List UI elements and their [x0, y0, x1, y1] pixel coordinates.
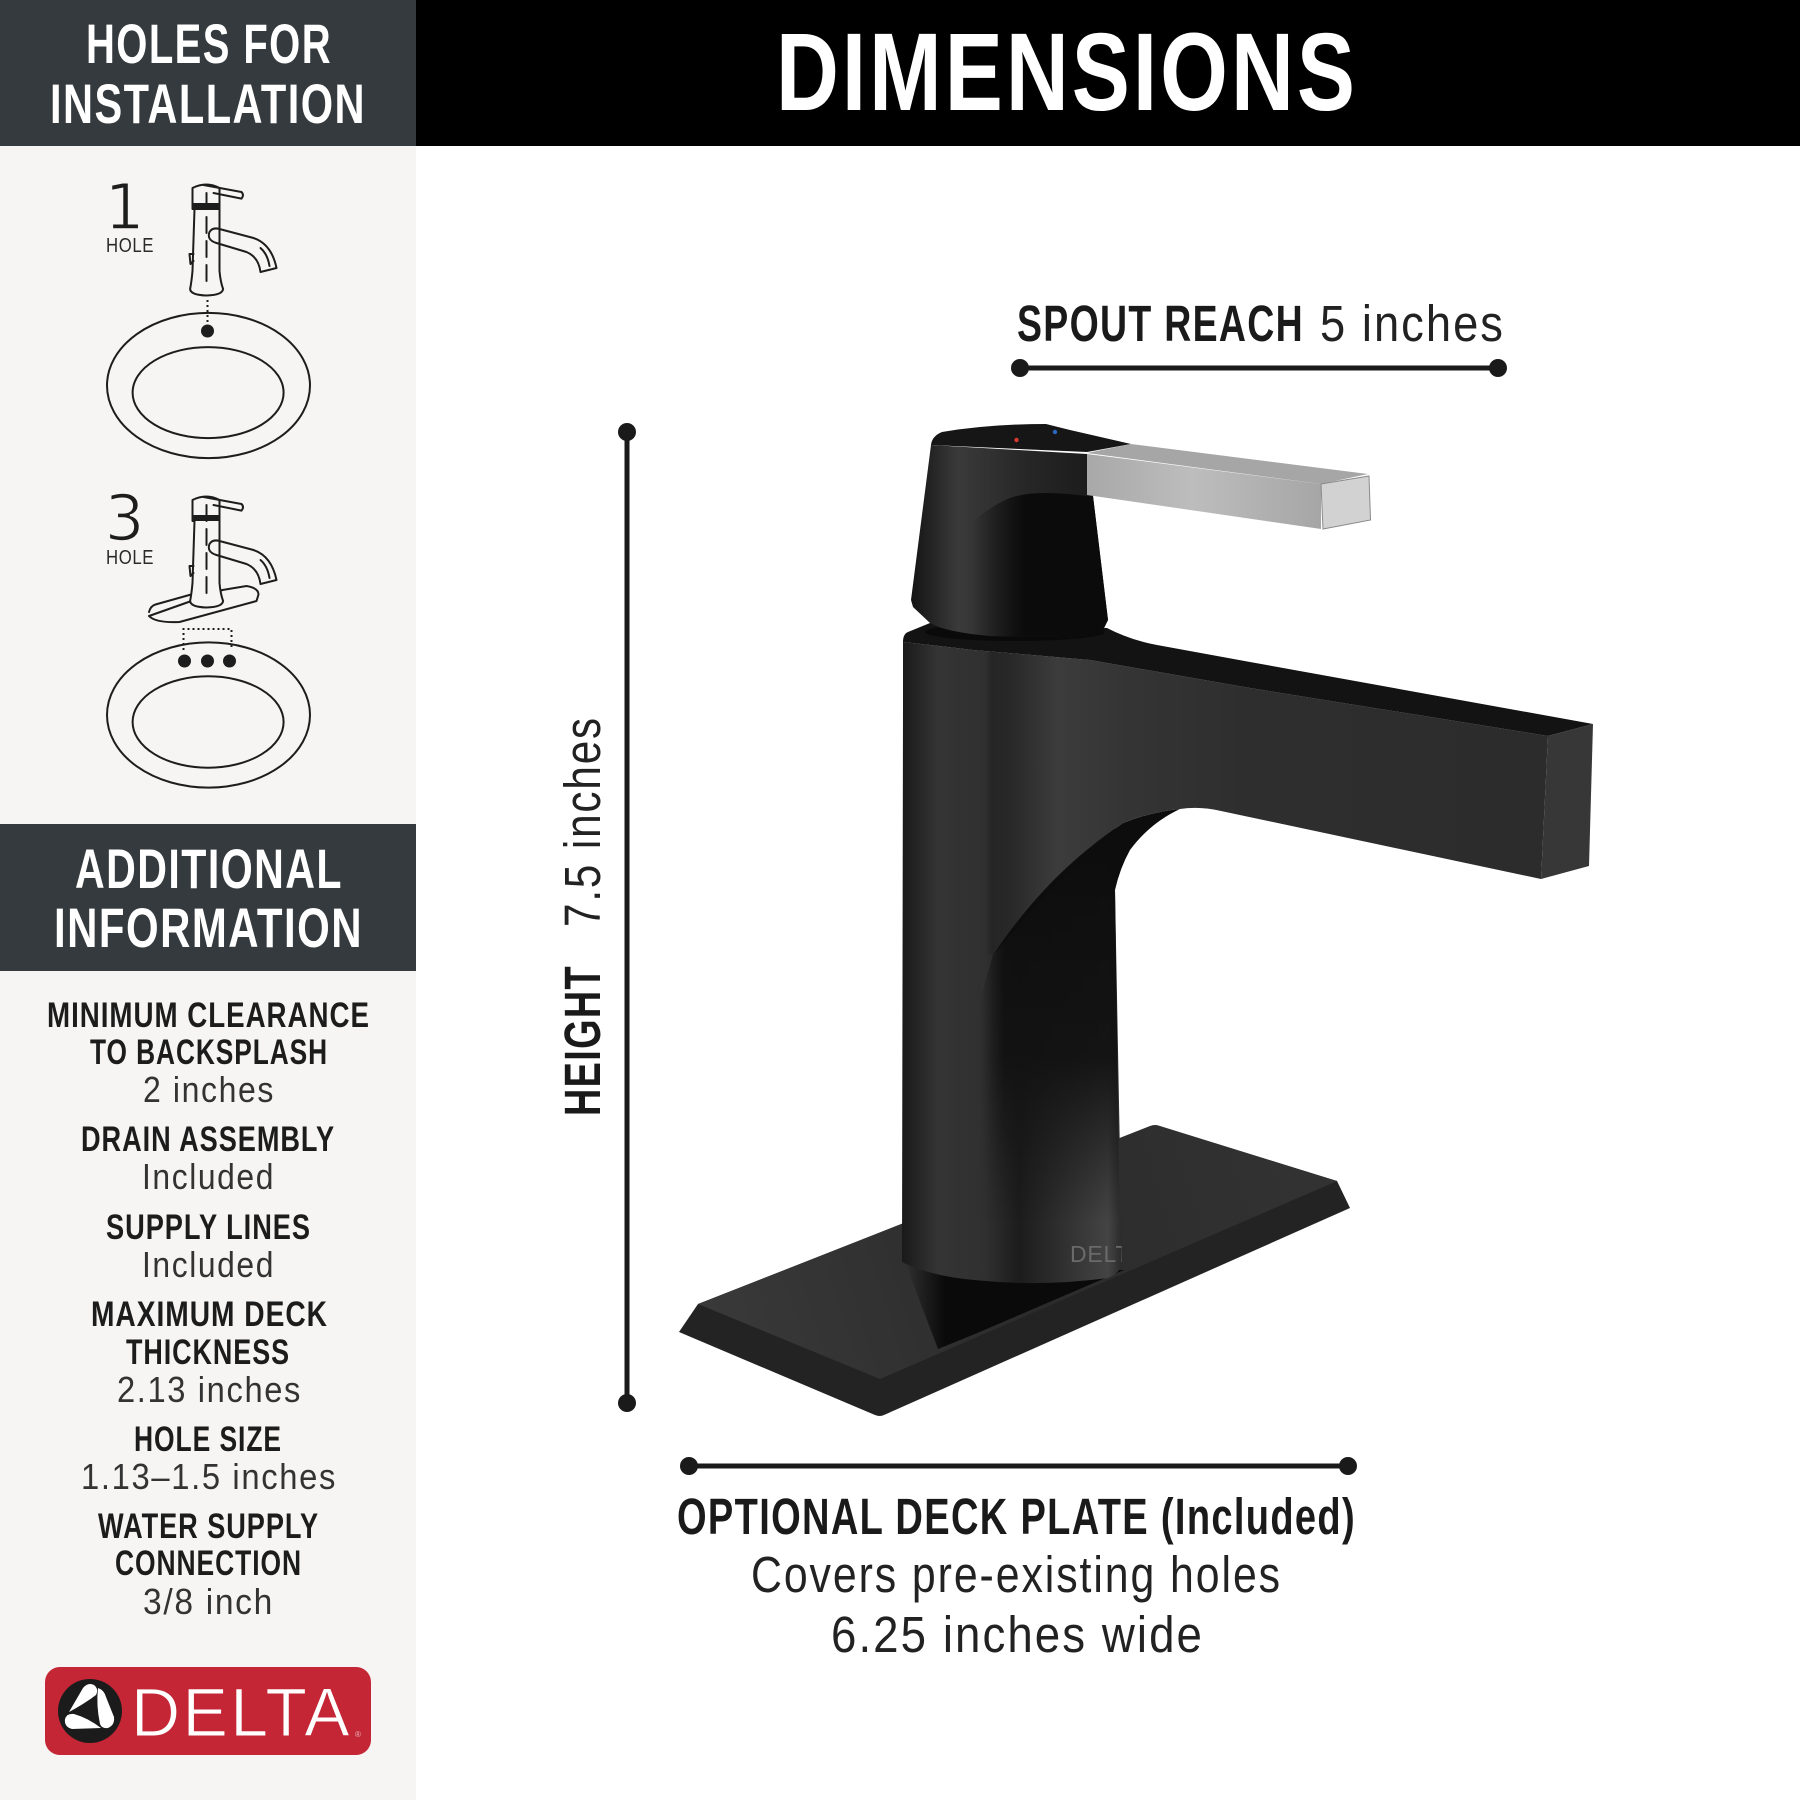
logo: Delta: ® [355, 1730, 361, 1739]
text block: minimum clearance: 2 inches [143, 1069, 275, 1110]
dimension: optional deck plate: OPTIONAL DECK PLATE (Included) [677, 1488, 1356, 1545]
text block: water supply connection: 3/8 inch [143, 1581, 274, 1622]
dimension: spout reach [1011, 295, 1507, 377]
text block: maximum deck thickness: 2.13 inches [117, 1369, 302, 1410]
dimension: optional deck plate: 6.25 inches wide [831, 1606, 1204, 1663]
text block: water supply connection [98, 1507, 319, 1622]
text block: drain assembly: Included [142, 1156, 275, 1197]
spout end face [1541, 724, 1593, 879]
text block: maximum deck thickness: MAXIMUM DECK [91, 1295, 328, 1334]
text block: hole size [81, 1420, 337, 1497]
logo: Delta: DELTA [131, 1674, 352, 1751]
text block: supply lines: SUPPLY LINES [106, 1208, 311, 1247]
text block: water supply connection: CONNECTION [115, 1544, 302, 1583]
heading: holes for installation [0, 0, 416, 146]
dimension: optional deck plate: Covers pre-existing holes [751, 1546, 1282, 1603]
panel: left sidebar [0, 0, 416, 1800]
text block: minimum clearance: TO BACKSPLASH [90, 1033, 328, 1072]
arch shadow band [993, 809, 1180, 955]
column shadow below spout [986, 860, 1119, 1192]
logo on column: DELTA [1070, 1241, 1145, 1267]
heading: holes for installation: HOLES FOR [86, 12, 332, 75]
spout body [903, 642, 1548, 955]
dimension: height: HEIGHT [554, 965, 611, 1116]
spout top surface [903, 623, 1593, 736]
text block: minimum clearance [47, 996, 370, 1110]
dimension: spout reach: SPOUT REACH [1017, 295, 1304, 352]
dimension: optional deck plate [677, 1457, 1357, 1663]
icon: 1 hole installation: HOLE [106, 235, 154, 257]
text block: hole size: HOLE SIZE [134, 1420, 282, 1459]
icon: 1 hole installation [104, 171, 310, 458]
dimension: height [554, 423, 636, 1412]
handle [911, 424, 1131, 637]
deck plate [679, 1125, 1350, 1416]
text block: supply lines: Included [142, 1244, 275, 1285]
text block: maximum deck thickness: THICKNESS [126, 1333, 290, 1372]
heading: holes for installation: INSTALLATION [50, 72, 366, 135]
heading: additional information: INFORMATION [54, 896, 363, 959]
icon: 1 hole installation: 1 [104, 171, 145, 244]
title: dimensions [416, 0, 1800, 146]
text block: supply lines [106, 1208, 311, 1285]
dimension: height: 7.5 inches [554, 716, 611, 927]
dimension: spout reach: 5 inches [1320, 295, 1505, 352]
text block: drain assembly [81, 1120, 335, 1197]
text block: minimum clearance: MINIMUM CLEARANCE [47, 996, 370, 1035]
icon: 3 hole installation: 3 [104, 482, 145, 555]
title: dimensions: DIMENSIONS [776, 11, 1358, 134]
icon: 3 hole installation: HOLE [106, 547, 154, 569]
heading: additional information: ADDITIONAL [75, 837, 343, 900]
heading: additional information [0, 824, 416, 971]
text block: maximum deck thickness [91, 1295, 328, 1410]
chrome lever [1087, 444, 1370, 529]
sidebar background [0, 0, 416, 1800]
handle base ring [925, 623, 1105, 641]
text block: hole size: 1.13–1.5 inches [81, 1456, 337, 1497]
faucet column [902, 700, 1122, 1283]
icon: 3 hole installation [104, 482, 310, 788]
logo: Delta [45, 1667, 371, 1755]
illustration: matte black faucet [679, 424, 1593, 1416]
text block: drain assembly: DRAIN ASSEMBLY [81, 1120, 335, 1159]
text block: water supply connection: WATER SUPPLY [98, 1507, 319, 1546]
